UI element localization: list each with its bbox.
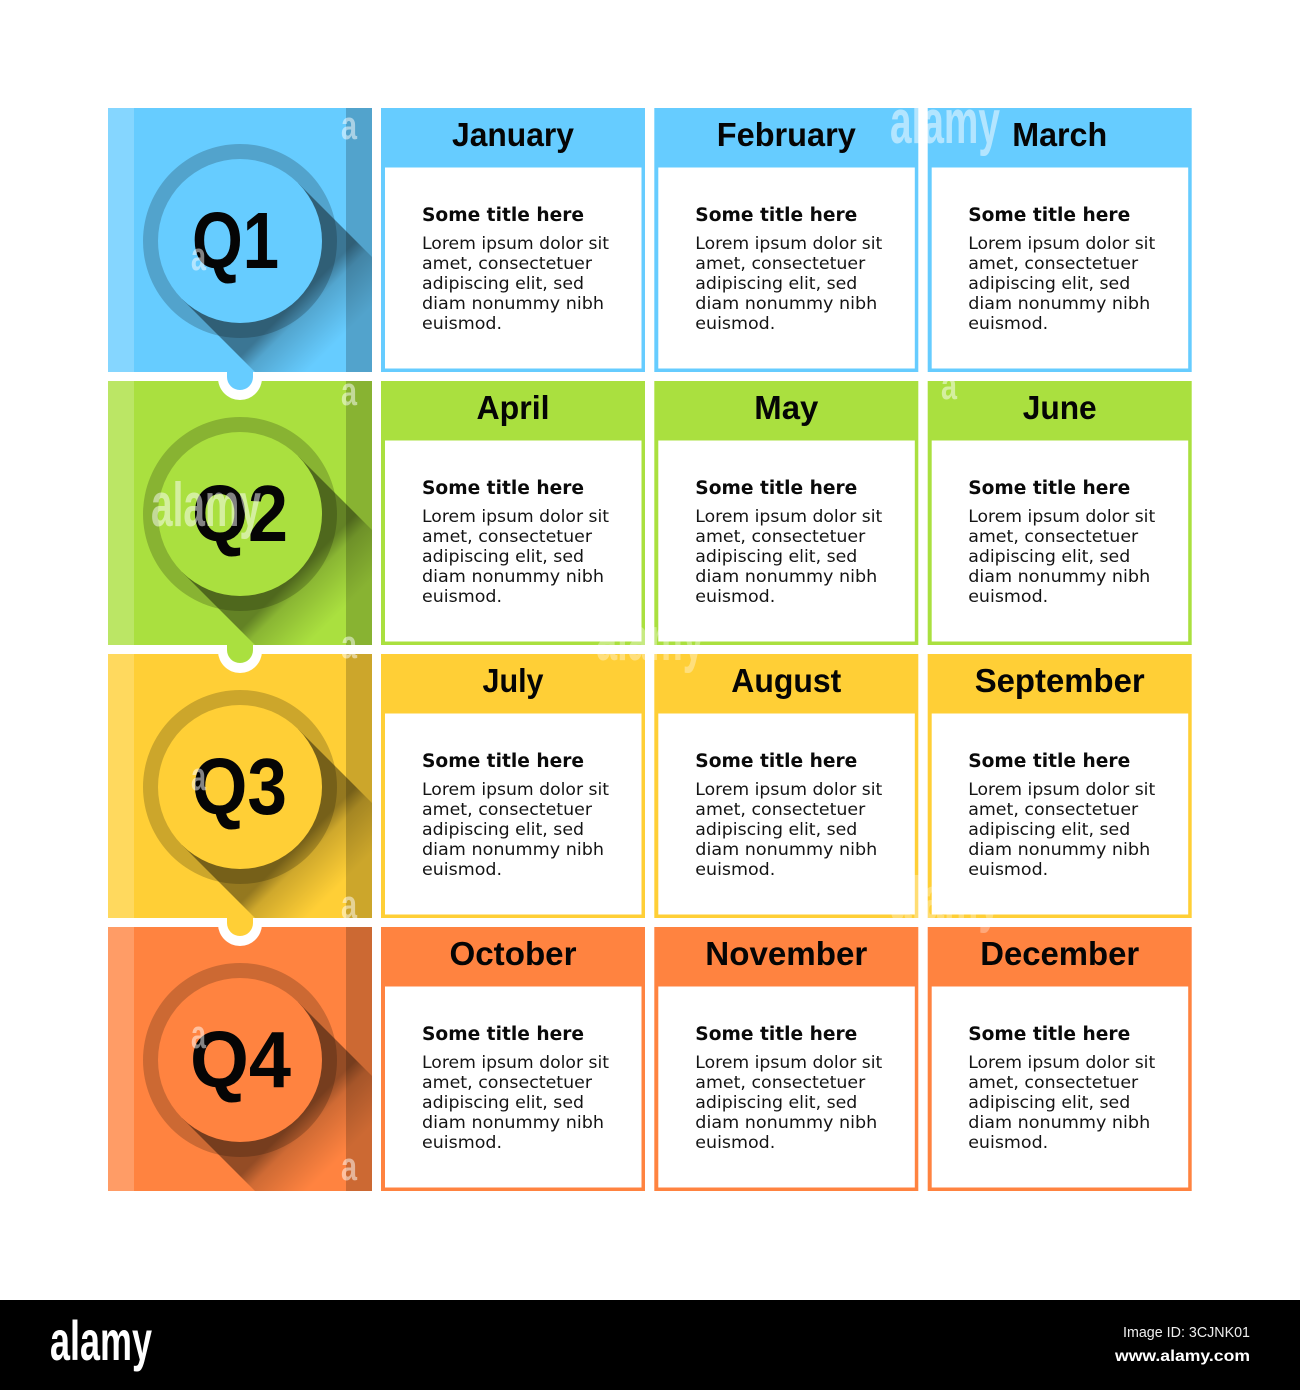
card text: diam nonummy nibh (695, 567, 877, 586)
card text: diam nonummy nibh (695, 840, 877, 859)
card text: adipiscing elit, sed (422, 274, 584, 293)
month heading: March (1012, 116, 1107, 153)
card text: adipiscing elit, sed (695, 547, 857, 566)
card text: euismod. (422, 587, 502, 606)
card text: amet, consectetuer (695, 800, 866, 819)
card text (968, 478, 1156, 606)
card text: amet, consectetuer (695, 1073, 866, 1092)
website: www.alamy.com (1114, 1348, 1250, 1365)
card text: diam nonummy nibh (695, 1113, 877, 1132)
month heading: June (1023, 389, 1097, 426)
card text: diam nonummy nibh (422, 567, 604, 586)
card text: Lorem ipsum dolor sit (968, 507, 1156, 526)
card: February (654, 108, 918, 372)
card text: adipiscing elit, sed (422, 1093, 584, 1112)
card text: euismod. (422, 860, 502, 879)
card text: euismod. (695, 860, 775, 879)
watermark: small a marks: a (341, 370, 358, 414)
watermark: small a marks: a (191, 755, 207, 799)
card text: euismod. (422, 314, 502, 333)
connector tab: Q1 to Q2 (218, 371, 262, 400)
Q1 label: Q1 (192, 196, 279, 285)
card text: Lorem ipsum dolor sit (968, 234, 1156, 253)
connector tab: Q2 to Q3 (218, 644, 262, 673)
card text: Some title here (422, 478, 584, 499)
card: December (928, 927, 1192, 1191)
card: May (654, 381, 918, 645)
card text: Lorem ipsum dolor sit (695, 507, 883, 526)
card text: Some title here (695, 205, 857, 226)
card text: amet, consectetuer (968, 800, 1138, 819)
watermark: large alamy marks: alamy (890, 865, 1000, 934)
card text: adipiscing elit, sed (695, 274, 857, 293)
card text: adipiscing elit, sed (968, 820, 1130, 839)
panel: Q1 quarter block (108, 108, 372, 372)
card text: diam nonummy nibh (422, 840, 604, 859)
card text: diam nonummy nibh (968, 1113, 1150, 1132)
card: November (654, 927, 918, 1191)
card text (968, 751, 1156, 879)
footer logo: alamy (50, 1309, 152, 1372)
card text: adipiscing elit, sed (968, 274, 1130, 293)
card text: Lorem ipsum dolor sit (695, 1053, 883, 1072)
card text (422, 751, 610, 879)
card text: euismod. (695, 1133, 775, 1152)
card text (695, 205, 883, 333)
card text: diam nonummy nibh (968, 840, 1150, 859)
card text: euismod. (968, 314, 1048, 333)
card text: amet, consectetuer (422, 1073, 592, 1092)
image id: Image ID: 3CJNK01 (1123, 1324, 1250, 1341)
card: March (928, 108, 1192, 372)
card text: diam nonummy nibh (422, 1113, 604, 1132)
card text: amet, consectetuer (695, 254, 866, 273)
card text: euismod. (968, 587, 1048, 606)
card text: Some title here (422, 1024, 584, 1045)
month heading: September (975, 662, 1145, 699)
card text (695, 751, 883, 879)
card: August (654, 654, 918, 918)
card text: diam nonummy nibh (695, 294, 877, 313)
card: September (928, 654, 1192, 918)
card text: diam nonummy nibh (968, 567, 1150, 586)
card text: diam nonummy nibh (968, 294, 1150, 313)
month heading: February (717, 116, 856, 153)
month heading: November (705, 935, 867, 972)
card: April (381, 381, 645, 645)
card text (968, 205, 1156, 333)
card text: amet, consectetuer (695, 527, 866, 546)
card text: Some title here (968, 205, 1130, 226)
card: January (381, 108, 645, 372)
month heading: December (980, 935, 1139, 972)
card text: Some title here (968, 1024, 1130, 1045)
card: July (381, 654, 645, 918)
month heading: October (450, 935, 577, 972)
card text (422, 205, 610, 333)
card text: Some title here (968, 478, 1130, 499)
card text: adipiscing elit, sed (695, 820, 857, 839)
card text: Some title here (422, 751, 584, 772)
card text: amet, consectetuer (968, 1073, 1138, 1092)
card text: Lorem ipsum dolor sit (968, 1053, 1156, 1072)
Q2 label: Q2 (192, 469, 288, 558)
panel: Q3 quarter block (108, 654, 372, 918)
card text: Lorem ipsum dolor sit (422, 780, 610, 799)
card text: Lorem ipsum dolor sit (422, 234, 610, 253)
watermark: small a marks: a (341, 883, 358, 927)
month heading: May (754, 389, 819, 426)
panel: Q2 quarter block (108, 381, 372, 645)
watermark: large alamy marks: alamy (596, 605, 704, 674)
Q4 label: Q4 (190, 1015, 291, 1104)
watermark: small a marks (191, 104, 958, 1189)
card text (422, 1024, 610, 1152)
card text: Some title here (695, 478, 857, 499)
watermark: large alamy marks: alamy (890, 88, 1000, 157)
watermark: large alamy marks: alamy (151, 471, 261, 540)
watermark: small a marks: a (191, 1013, 207, 1057)
footer bar (0, 1300, 1300, 1390)
card text: amet, consectetuer (422, 527, 592, 546)
panel: Q4 quarter block (108, 927, 372, 1191)
card text: euismod. (968, 860, 1048, 879)
card text: adipiscing elit, sed (968, 1093, 1130, 1112)
card text: adipiscing elit, sed (422, 547, 584, 566)
month heading: April (476, 389, 550, 426)
card: June (928, 381, 1192, 645)
card text: euismod. (695, 587, 775, 606)
card: October (381, 927, 645, 1191)
card text (422, 478, 610, 606)
card text: diam nonummy nibh (422, 294, 604, 313)
card text: amet, consectetuer (422, 800, 592, 819)
card text: Lorem ipsum dolor sit (422, 507, 610, 526)
card text: Some title here (695, 751, 857, 772)
card text (968, 1024, 1156, 1152)
watermark: small a marks: a (341, 104, 358, 148)
card text: amet, consectetuer (968, 254, 1138, 273)
card text (695, 1024, 883, 1152)
card text: adipiscing elit, sed (968, 547, 1130, 566)
connector tab: Q3 to Q4 (218, 917, 262, 946)
card text: Lorem ipsum dolor sit (695, 234, 883, 253)
card text: Lorem ipsum dolor sit (422, 1053, 610, 1072)
watermark: small a marks: a (941, 364, 958, 408)
month heading: January (452, 116, 575, 153)
card text: Some title here (968, 751, 1130, 772)
card text: Lorem ipsum dolor sit (968, 780, 1156, 799)
watermark: large alamy marks (151, 88, 1000, 934)
watermark: small a marks: a (341, 1145, 358, 1189)
Q3 label: Q3 (192, 742, 287, 831)
card text: Some title here (695, 1024, 857, 1045)
month heading: July (482, 662, 544, 699)
watermark: small a marks: a (191, 235, 207, 279)
card text: adipiscing elit, sed (695, 1093, 857, 1112)
card text (695, 478, 883, 606)
watermark: small a marks: a (341, 623, 358, 667)
card text: euismod. (422, 1133, 502, 1152)
card text: euismod. (695, 314, 775, 333)
card text: adipiscing elit, sed (422, 820, 584, 839)
card text: Some title here (422, 205, 584, 226)
card text: amet, consectetuer (422, 254, 592, 273)
card text: Lorem ipsum dolor sit (695, 780, 883, 799)
month heading: August (731, 662, 841, 699)
card text: euismod. (968, 1133, 1048, 1152)
card text: amet, consectetuer (968, 527, 1138, 546)
